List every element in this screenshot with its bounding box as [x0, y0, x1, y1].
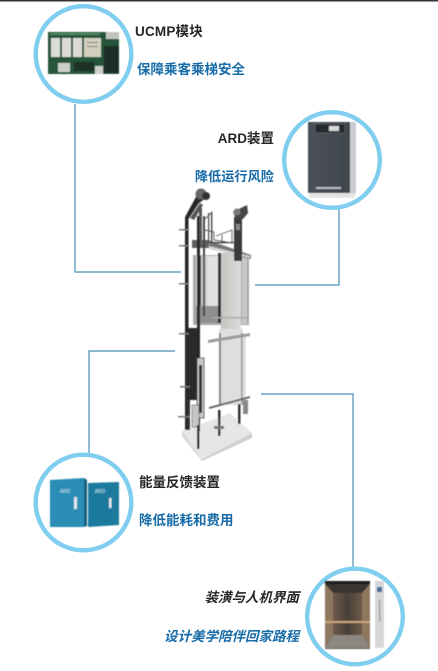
- connector line: ARD device to elevator: [255, 209, 339, 285]
- icon: ARD cabinet: [308, 122, 356, 198]
- connector line: interior and HMI to elevator: [261, 394, 353, 567]
- top edge bar: [0, 0, 438, 2]
- car panels lower: [219, 329, 246, 405]
- car header beam: [192, 240, 251, 259]
- heading: UCMP module: UCMP模块: [135, 24, 203, 39]
- text: reduce energy cost: 降低能耗和费用: [139, 513, 234, 528]
- guide rail and hoistway frame: [185, 193, 212, 431]
- icon: blue feedback cabinets: ARD: [60, 489, 71, 495]
- connector line: UCMP module to elevator: [75, 104, 181, 272]
- car panels upper: [193, 253, 249, 329]
- concrete base: [182, 413, 252, 461]
- counterweight: [186, 328, 204, 430]
- crossbeams and brackets: [178, 229, 250, 418]
- top guard railing: [204, 212, 232, 243]
- heading: energy feedback device: 能量反馈装置: [139, 475, 220, 490]
- elevator illustration: [178, 188, 252, 461]
- second machine on car top: [233, 205, 248, 261]
- icon: blue feedback cabinets: ARD: [95, 489, 106, 495]
- icon: HMI control panel: [375, 581, 384, 648]
- circle: interior and HMI: [307, 569, 403, 664]
- circle: UCMP module: [36, 6, 131, 102]
- traction machine: [196, 188, 210, 240]
- text: design aesthetics on the way home: 设计美学陪伴回家路程: [164, 629, 299, 644]
- circle: ARD device: [284, 112, 380, 208]
- buffer posts: [197, 400, 248, 449]
- icon: UCMP circuit board: [48, 32, 119, 74]
- connector line: energy feedback device to elevator: [89, 351, 175, 453]
- icon: blue feedback cabinets: [50, 478, 119, 527]
- text: reduce operating risk: 降低运行风险: [195, 169, 274, 184]
- heading: interior and human-machine interface: 装潢与人机界面: [204, 590, 299, 605]
- circle: energy feedback device: [36, 455, 131, 550]
- text: protect passenger safety: 保障乘客乘梯安全: [137, 62, 245, 77]
- heading: ARD device: ARD装置: [218, 131, 274, 146]
- icon: elevator cabin interior: [325, 581, 370, 649]
